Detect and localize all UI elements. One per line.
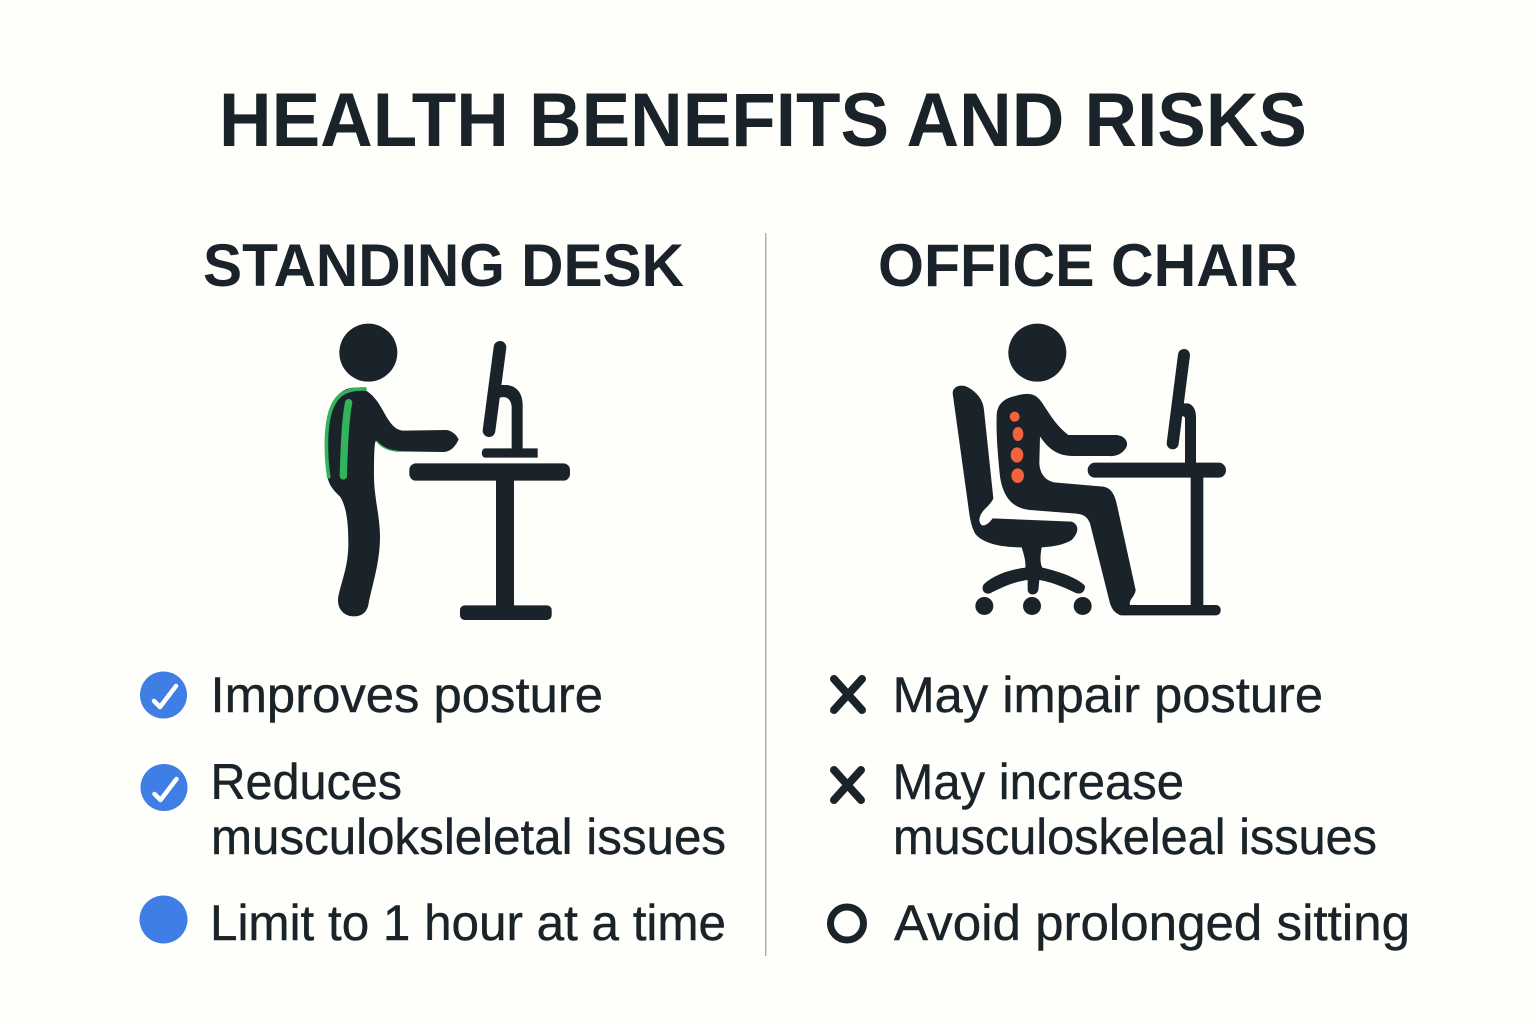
panel: office chair — [830, 232, 1410, 951]
bullet: reduces issues — [140, 754, 726, 865]
bullet: may increase issues: May increase — [892, 754, 1184, 810]
bullet: avoid prolonged sitting: Avoid prolonged sitting — [894, 895, 1410, 951]
bullet: may increase issues — [834, 754, 1377, 865]
bullet: improves posture: Improves posture — [210, 667, 603, 723]
icon: standing person at desk — [326, 324, 570, 620]
bullet: may impair posture: May impair posture — [892, 667, 1323, 723]
panel: standing desk — [140, 232, 726, 951]
title: HEALTH BENEFITS AND RISKS — [219, 78, 1307, 163]
heading: office chair: OFFICE CHAIR — [878, 232, 1298, 299]
bullet: reduces issues: musculoksleletal issues — [211, 809, 726, 865]
heading: standing desk: STANDING DESK — [203, 232, 684, 299]
bullet: reduces issues: Reduces — [210, 754, 402, 810]
bullet: limit to one hour: Limit to 1 hour at a time — [210, 895, 726, 951]
icon: seated person at desk — [953, 324, 1226, 615]
bullet: may increase issues: musculoskeleal issues — [893, 809, 1377, 865]
